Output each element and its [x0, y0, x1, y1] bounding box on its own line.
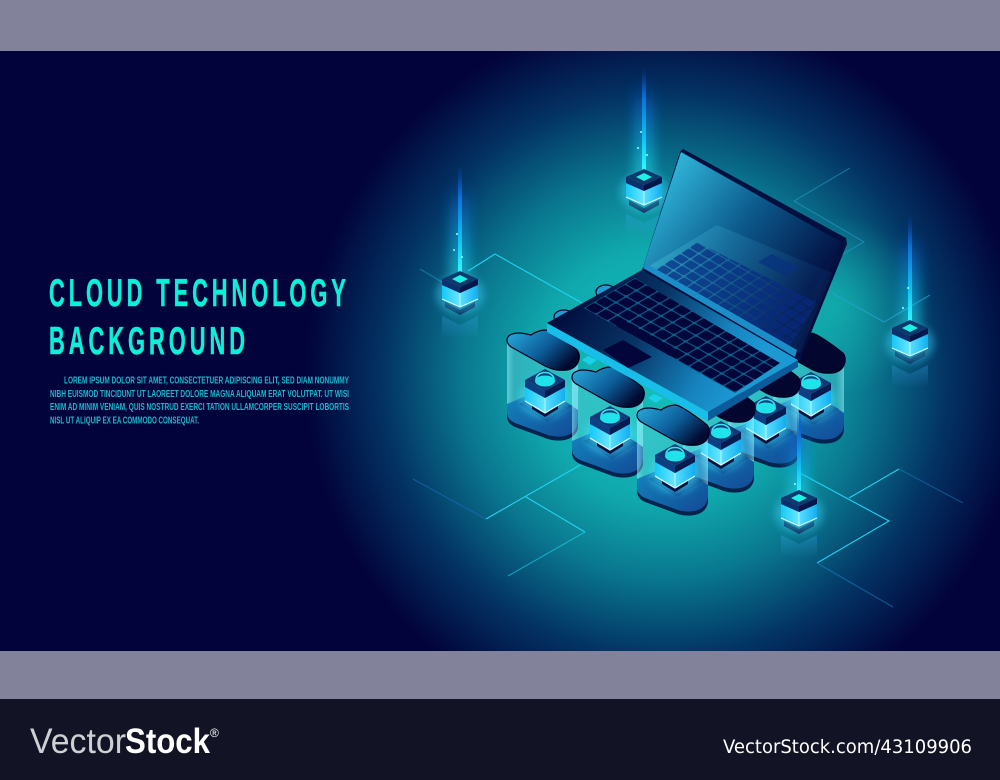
circuit lines [413, 168, 963, 607]
laptop lid [642, 149, 847, 362]
footer logo: Stock [125, 722, 210, 761]
beacon: right [886, 215, 934, 388]
storage cylinder: back right [773, 333, 845, 444]
footer image id: VectorStock.com/43109906 [723, 736, 972, 758]
laptop base top [547, 270, 798, 412]
body text: NIBH EUISMOD TINCIDUNT UT LAOREET DOLORE MAGNA ALIQUAM ERAT VOLUTPAT. UT WISI [50, 388, 349, 400]
bottom grey band [0, 651, 1000, 699]
laptop [547, 149, 847, 421]
title: CLOUD TECHNOLOGY [49, 270, 346, 315]
footer logo [30, 722, 219, 761]
storage cylinder: back middle [728, 357, 800, 468]
footer bar [0, 699, 1000, 780]
beacon: top centre [620, 68, 668, 237]
main dark background panel with teal glow [0, 51, 1000, 651]
storage cylinder: back front [683, 382, 755, 493]
keyboard [584, 278, 780, 393]
screen reflection of the keyboard [643, 225, 832, 357]
body text: LOREM IPSUM DOLOR SIT AMET, CONSECTETUER ADIPISCING ELIT, SED DIAM NONUMMY [64, 374, 349, 386]
small glowing blocks between clouds [582, 356, 663, 403]
beacon: left [436, 165, 484, 339]
laptop screen [643, 152, 841, 352]
body text [50, 374, 349, 426]
body text: ENIM AD MINIM VENIAM, QUIS NOSTRUD EXERCI TATION ULLAMCORPER SUSCIPIT LOBORTIS [50, 401, 349, 413]
footer logo: Vector [30, 722, 126, 761]
storage cylinder: middle [572, 367, 644, 478]
title: BACKGROUND [49, 318, 245, 363]
body text: NISL UT ALIQUIP EX EA COMMODO CONSEQUAT. [50, 414, 199, 426]
beacon: bottom right [775, 410, 823, 558]
back clouds peeking behind the laptop [554, 285, 616, 324]
storage cylinder: front [637, 405, 709, 516]
laptop base edge right [708, 360, 798, 421]
storage cylinder: left [507, 330, 579, 441]
footer logo: ® [210, 726, 219, 740]
trackpad [603, 340, 652, 368]
laptop base edge left [547, 323, 708, 421]
top grey band [0, 0, 1000, 51]
title [49, 270, 346, 363]
